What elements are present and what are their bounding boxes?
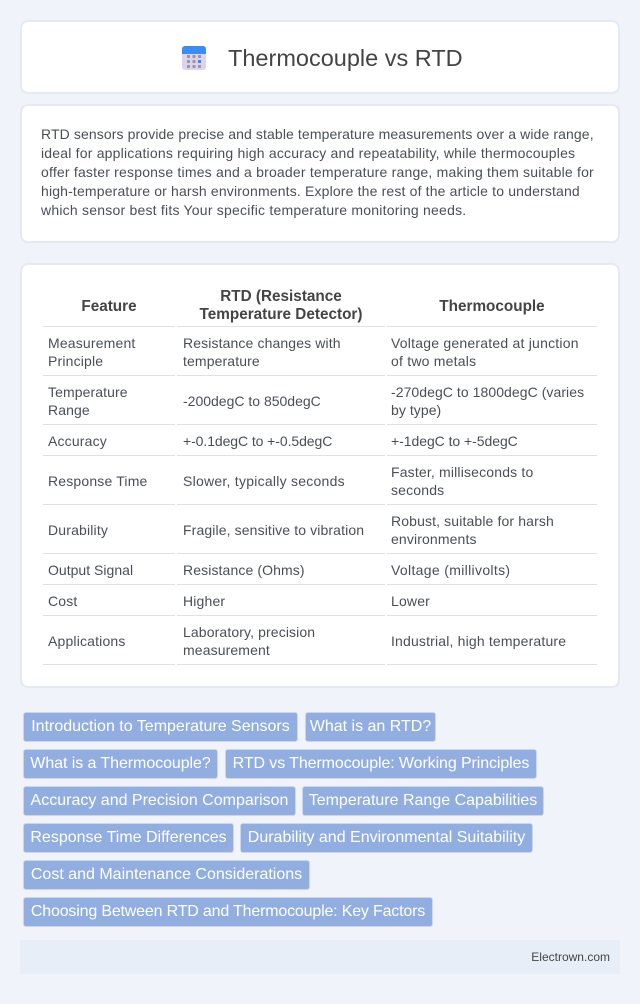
chip: What is a Thermocouple? [30,755,211,772]
table header row [81,288,545,323]
chip [23,712,298,742]
row: response time: Response Time [48,473,147,489]
row: durability: Durability [48,522,108,538]
row: measurement principle: Principle [48,353,103,369]
chip: Cost and Maintenance Considerations [31,866,302,883]
chip [302,786,544,816]
comparison table card [20,263,620,688]
intro text [41,126,594,218]
chip [305,712,436,742]
row: cost: Cost [48,593,77,609]
chip [23,860,310,890]
footer source text: Electrown.com [531,950,610,964]
row: output signal: Output Signal [48,562,133,578]
row: output signal [48,562,510,578]
chip [23,897,433,927]
row: measurement principle [48,335,579,369]
row: measurement principle: Resistance changes with [183,335,341,351]
row: temperature range: -200degC to 850degC [183,393,321,409]
icon: calendar grid [182,46,206,70]
topic chips [23,712,544,927]
chip: Choosing Between RTD and Thermocouple: Key Factors [31,903,425,920]
row: accuracy: +-1degC to +-5degC [391,433,518,449]
title: Thermocouple vs RTD [228,45,463,71]
chip: Durability and Environmental Suitability [248,829,525,846]
row: temperature range: Temperature [48,384,128,400]
row: accuracy: Accuracy [48,433,107,449]
intro text: which sensor best fits Your specific temperature monitoring needs. [41,202,466,218]
row: applications: Industrial, high temperature [391,633,566,649]
intro text: ideal for applications requiring high accuracy and repeatability, while thermocouples [41,145,575,161]
row: response time: seconds [391,482,444,498]
table header row: Feature [81,298,137,315]
chip: Response Time Differences [30,829,227,846]
chip: Accuracy and Precision Comparison [31,792,288,809]
row: output signal: Resistance (Ohms) [183,562,305,578]
table header row: Thermocouple [439,298,545,315]
row: measurement principle: Voltage generated at junction [391,335,579,351]
row: durability: Robust, suitable for harsh [391,513,554,529]
row: durability: environments [391,531,477,547]
table header row: Temperature Detector) [200,306,362,323]
row: cost [48,593,430,609]
row: response time: Faster, milliseconds to [391,464,533,480]
chip [225,749,537,779]
row: cost: Higher [183,593,225,609]
intro text: RTD sensors provide precise and stable temperature measurements over a wide range, [41,126,594,142]
row: applications [48,624,566,658]
chip: What is an RTD? [310,718,431,735]
row: temperature range [48,384,584,418]
intro text: offer faster response times and a broader temperature range, making them suitable for [41,164,594,180]
row: temperature range: -270degC to 1800degC (varies [391,384,584,400]
chip [23,786,296,816]
row: applications: measurement [183,642,270,658]
chip: Introduction to Temperature Sensors [31,718,290,735]
chip: RTD vs Thermocouple: Working Principles [233,755,529,772]
chip [23,749,218,779]
intro paragraph card [20,104,620,243]
row: temperature range: by type) [391,402,441,418]
row: output signal: Voltage (millivolts) [391,562,510,578]
row: accuracy [48,433,518,449]
row: response time [48,464,533,498]
row: temperature range: Range [48,402,90,418]
header card [20,20,620,94]
row: durability: Fragile, sensitive to vibration [183,522,364,538]
intro text: high-temperature or harsh environments. Explore the rest of the article to understand [41,183,580,199]
table header row: RTD (Resistance [220,288,342,305]
row: response time: Slower, typically seconds [183,473,345,489]
row: measurement principle: Measurement [48,335,135,351]
row: cost: Lower [391,593,430,609]
row: accuracy: +-0.1degC to +-0.5degC [183,433,332,449]
chip [240,823,533,853]
row: applications: Laboratory, precision [183,624,315,640]
row: measurement principle: of two metals [391,353,476,369]
chip: Temperature Range Capabilities [309,792,537,809]
row: durability [48,513,554,547]
row: applications: Applications [48,633,126,649]
chip [23,823,234,853]
footer bar [20,940,620,974]
row: measurement principle: temperature [183,353,260,369]
